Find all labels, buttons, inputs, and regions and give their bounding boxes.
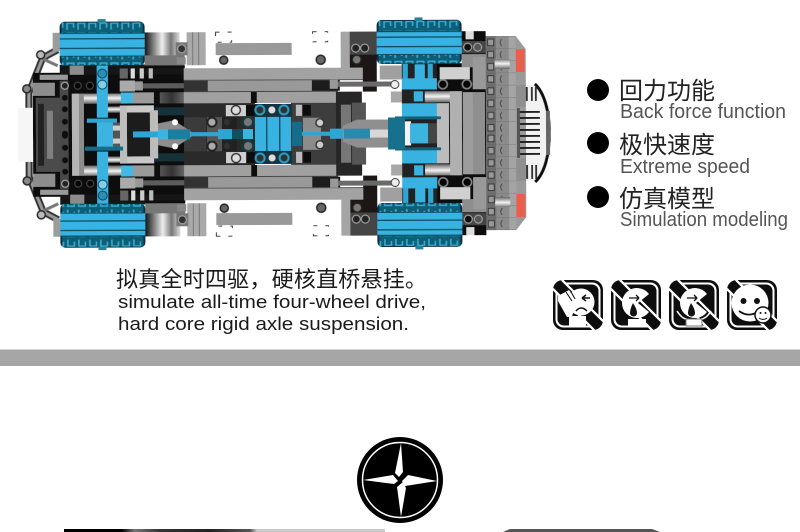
logo star bbox=[363, 443, 437, 517]
chassis lower half bbox=[18, 131, 551, 251]
feature title: 仿真模型 bbox=[619, 186, 715, 213]
caption english line 2: hard core rigid axle suspension. bbox=[118, 313, 409, 334]
icon: no rubbing eyes warning bbox=[552, 279, 604, 331]
chassis illustration bbox=[18, 17, 551, 251]
bullet bbox=[587, 79, 609, 101]
section divider band bbox=[0, 350, 800, 366]
feature: back force function bbox=[587, 78, 786, 123]
feature subtitle: Back force function bbox=[620, 101, 786, 123]
next section image edge right bbox=[503, 529, 660, 532]
next section image edge left bbox=[64, 529, 385, 532]
icon: no choking warning bbox=[668, 279, 720, 331]
caption bbox=[116, 267, 427, 334]
feature subtitle: Simulation modeling bbox=[620, 209, 788, 231]
front differential gear bar bbox=[85, 147, 123, 151]
chassis upper half bbox=[18, 17, 550, 137]
feature: extreme speed bbox=[587, 132, 750, 178]
feature subtitle: Extreme speed bbox=[620, 156, 750, 178]
bullet bbox=[587, 132, 609, 154]
caption chinese: 拟真全时四驱，硬核直桥悬挂。 bbox=[116, 267, 427, 292]
icon: no small children warning bbox=[726, 279, 778, 331]
caption english line 1: simulate all-time four-wheel drive, bbox=[118, 291, 426, 312]
icon: no swallowing warning bbox=[610, 279, 662, 331]
feature title: 回力功能 bbox=[619, 78, 715, 105]
feature title: 极快速度 bbox=[619, 132, 715, 159]
bullet bbox=[587, 186, 609, 208]
logo badge bbox=[357, 437, 443, 523]
feature: simulation modeling bbox=[587, 186, 788, 231]
